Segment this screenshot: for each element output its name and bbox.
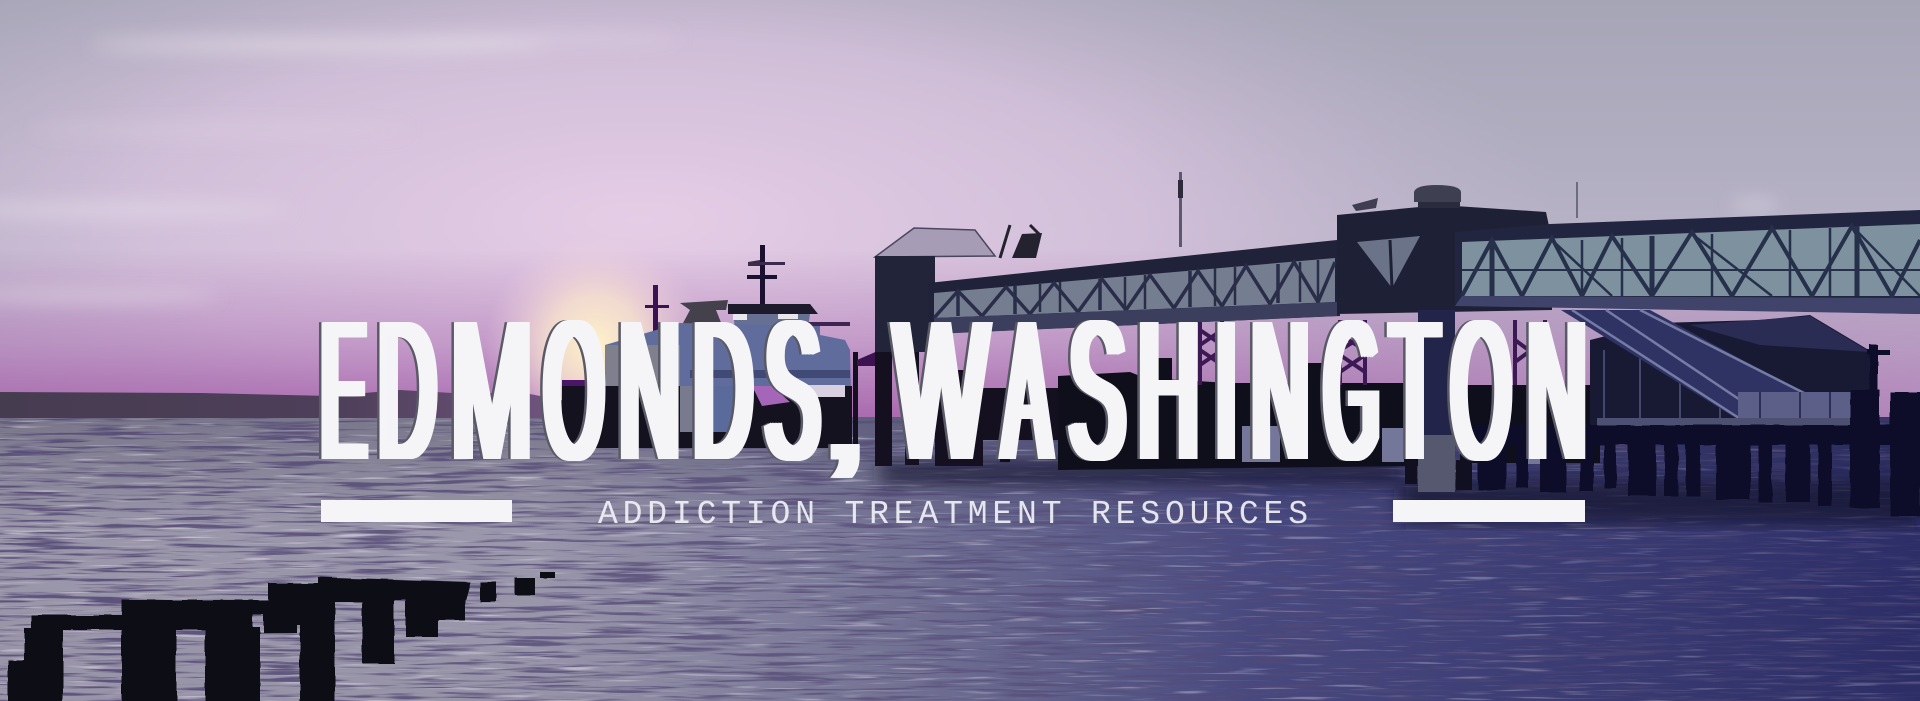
title: N <box>614 280 674 502</box>
title: G <box>1318 280 1373 502</box>
walkway right <box>1455 210 1920 314</box>
title: I <box>1211 280 1230 502</box>
left bar <box>321 500 512 522</box>
clouds <box>0 32 1779 302</box>
title: S <box>1064 280 1120 502</box>
title: M <box>446 280 527 502</box>
title: O <box>1446 280 1505 502</box>
stairway <box>1561 310 1854 422</box>
title: , <box>813 330 866 490</box>
left dock dolphins <box>853 345 1063 466</box>
title: H <box>1133 280 1194 502</box>
distant hills <box>0 390 620 418</box>
central tower and dome <box>1337 185 1552 314</box>
water <box>0 417 1920 701</box>
title: D <box>688 280 746 502</box>
mid pier pilings and trestle <box>1000 318 1600 470</box>
central pillar <box>1405 310 1472 492</box>
title: T <box>1385 280 1434 502</box>
title: W <box>889 280 982 502</box>
title: E <box>316 280 360 502</box>
left tower with netting <box>875 225 1042 352</box>
water gaps under pier <box>1242 426 1554 466</box>
title: S <box>760 280 815 502</box>
terminal building <box>1590 315 1872 425</box>
ferry <box>562 245 852 448</box>
mast <box>1178 172 1578 247</box>
pier deck <box>1597 418 1857 428</box>
walkway left <box>928 240 1340 334</box>
foreground ruined pilings <box>8 572 555 701</box>
title: N <box>1246 280 1303 502</box>
subtitle: ADDICTION TREATMENT RESOURCES <box>598 496 1308 533</box>
dock reflection <box>880 462 1920 524</box>
right piles <box>1472 345 1920 516</box>
title: D <box>373 280 430 502</box>
title: N <box>1522 280 1581 502</box>
title: A <box>998 280 1045 502</box>
sky <box>0 0 1920 420</box>
title: O <box>539 280 598 502</box>
right bar <box>1393 500 1585 522</box>
